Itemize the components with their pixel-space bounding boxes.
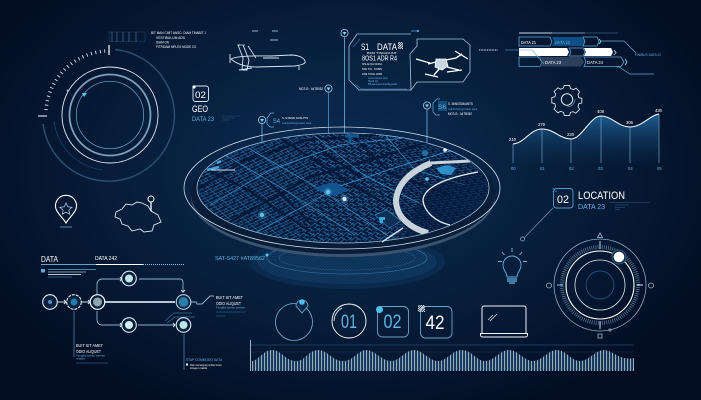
callout: s4: S4 — [273, 118, 280, 125]
flow text: stap — [186, 357, 222, 370]
bar: data table: DATA 21 — [521, 40, 536, 46]
panel: s1 data: DOE TINCIL ADIM — [362, 72, 382, 76]
location label: LOCATION — [578, 190, 625, 202]
chart: line chart: 430 — [655, 108, 663, 113]
geo badge — [192, 85, 240, 123]
icon: gear — [552, 85, 582, 115]
badge: 02 — [376, 306, 408, 337]
location label — [520, 188, 650, 241]
platform base under map — [249, 235, 445, 289]
flow chart — [43, 271, 214, 370]
panel: s1 data: BUR TINCIDUNT — [367, 51, 397, 55]
flow text: right — [216, 295, 246, 316]
waveform chart — [250, 340, 634, 371]
location label: DATA 23 — [578, 204, 605, 211]
bar: data table: FINIBUS DATA 02 — [635, 53, 661, 57]
dial caption text: PITRIDAM MPLEG MODE CS — [156, 45, 197, 49]
icon: uav drone — [230, 31, 305, 70]
panel: s1 data: Sed ut — [368, 79, 378, 83]
callout: s4: S. ETEND ADSUITS — [282, 116, 308, 120]
flow text: right: Fringilla lacinia. pertitor — [216, 306, 245, 310]
icon: circle with pin — [276, 299, 312, 340]
bar: data table: DATA 24 — [587, 60, 603, 66]
chart: line chart — [509, 108, 663, 171]
chart: line chart: 408 — [597, 109, 605, 114]
panel: s1 data: DATA — [377, 42, 397, 52]
flow text: lower: ODIO ALIQUET — [76, 349, 101, 355]
callout: s6: S. MINGSIBIANTS — [448, 102, 473, 106]
badge: 42: 42 — [426, 313, 444, 334]
callout: s4 — [258, 113, 312, 215]
flow text: stap: integer mattis — [190, 366, 208, 370]
panel: s1 data — [349, 30, 419, 90]
data heading: DATA 242 — [95, 256, 117, 262]
badge: 01: 01 — [341, 312, 357, 333]
chart: line chart: 05 — [657, 166, 662, 171]
geo badge: GEO — [192, 104, 208, 115]
chart: line chart: 220 — [567, 132, 575, 137]
flow text: lower: Fringilla lacinia. pertitor — [76, 354, 105, 358]
callout: s4: reinforcing/mare sed. — [282, 121, 312, 125]
geo badge: DATA 23 — [192, 116, 214, 123]
satellite code label — [215, 254, 268, 262]
dial caption text: VESTIBULUM ADS — [156, 36, 186, 40]
flow text: right: BUIT SIT AMET — [216, 295, 243, 301]
bar: data table: DATA 23 — [545, 60, 561, 66]
callout: s6: S6 — [438, 104, 446, 111]
flow text: lower — [76, 343, 108, 363]
dial caption text — [151, 31, 206, 49]
badge: 42 — [418, 305, 452, 338]
chart: line chart: 04 — [628, 166, 633, 171]
flow text: stap: Diam consequat porttitor lorem — [190, 363, 222, 367]
map disc — [184, 127, 500, 257]
flow text: stap: STAP COMMODO DATA — [186, 357, 222, 362]
data heading: DATA — [41, 255, 59, 264]
callout: s6: reinforcing/mare sed. — [448, 107, 478, 111]
panel: s1 data: S1 — [361, 42, 369, 52]
panel: s1 data: NISL ELITAL MASSA — [362, 62, 382, 66]
geo badge: 02 — [195, 90, 206, 100]
pin line: left centre — [299, 85, 332, 192]
callout: s6 — [423, 99, 478, 179]
dial caption text: DIAM ON — [156, 40, 170, 44]
panel: s1 data: NISI TIN · NOBIS — [362, 67, 382, 71]
icon: region map with magnifier — [115, 196, 161, 232]
callout: s6: MCS-B · A4TB052 — [448, 112, 472, 116]
icon: pin with star — [55, 195, 76, 227]
panel: s1 data: consectetuer arcu — [368, 76, 388, 80]
flow text: lower: mattis — [76, 356, 86, 360]
location label: 02 — [557, 194, 569, 206]
river — [403, 172, 488, 238]
badge: 02: 02 — [384, 312, 402, 333]
left radial dial — [38, 32, 174, 181]
chart: line chart: 02 — [569, 166, 574, 171]
bar: data table: DATA 22 — [555, 40, 570, 46]
flow text: right: ODIO ALIQUET — [216, 301, 241, 307]
panel: s1 data: 8OS1 ADR R4 — [362, 56, 397, 62]
data heading — [41, 255, 185, 277]
panel: s1 data: Maecenas/ligula — [368, 82, 398, 86]
pin line: left centre: MCS-B · A4TB052 — [299, 87, 323, 91]
panel: quadcopter — [410, 39, 470, 90]
chart: line chart: 03 — [598, 166, 603, 171]
chart: line chart: 306 — [626, 120, 634, 125]
icon: laptop — [480, 306, 528, 337]
dial caption text: BIT MAN CIMT ANSC. DIAM TMABIT 1 — [151, 31, 206, 35]
icon: light bulb — [498, 248, 527, 283]
badge: 01 — [332, 304, 366, 338]
chart: line chart: 01 — [540, 166, 545, 171]
flow text: lower: BUIT SIT AMET — [76, 343, 103, 349]
chart: line chart: 210 — [509, 137, 517, 142]
pin line: centre long — [341, 29, 348, 199]
chart: line chart: 00 — [511, 166, 516, 171]
right radial dial — [546, 233, 654, 338]
chart: line chart: 279 — [538, 122, 546, 127]
bar: data table — [479, 33, 661, 74]
map streets — [198, 133, 488, 243]
satellite code label: SAT-S427 #AT89562 — [215, 256, 265, 262]
